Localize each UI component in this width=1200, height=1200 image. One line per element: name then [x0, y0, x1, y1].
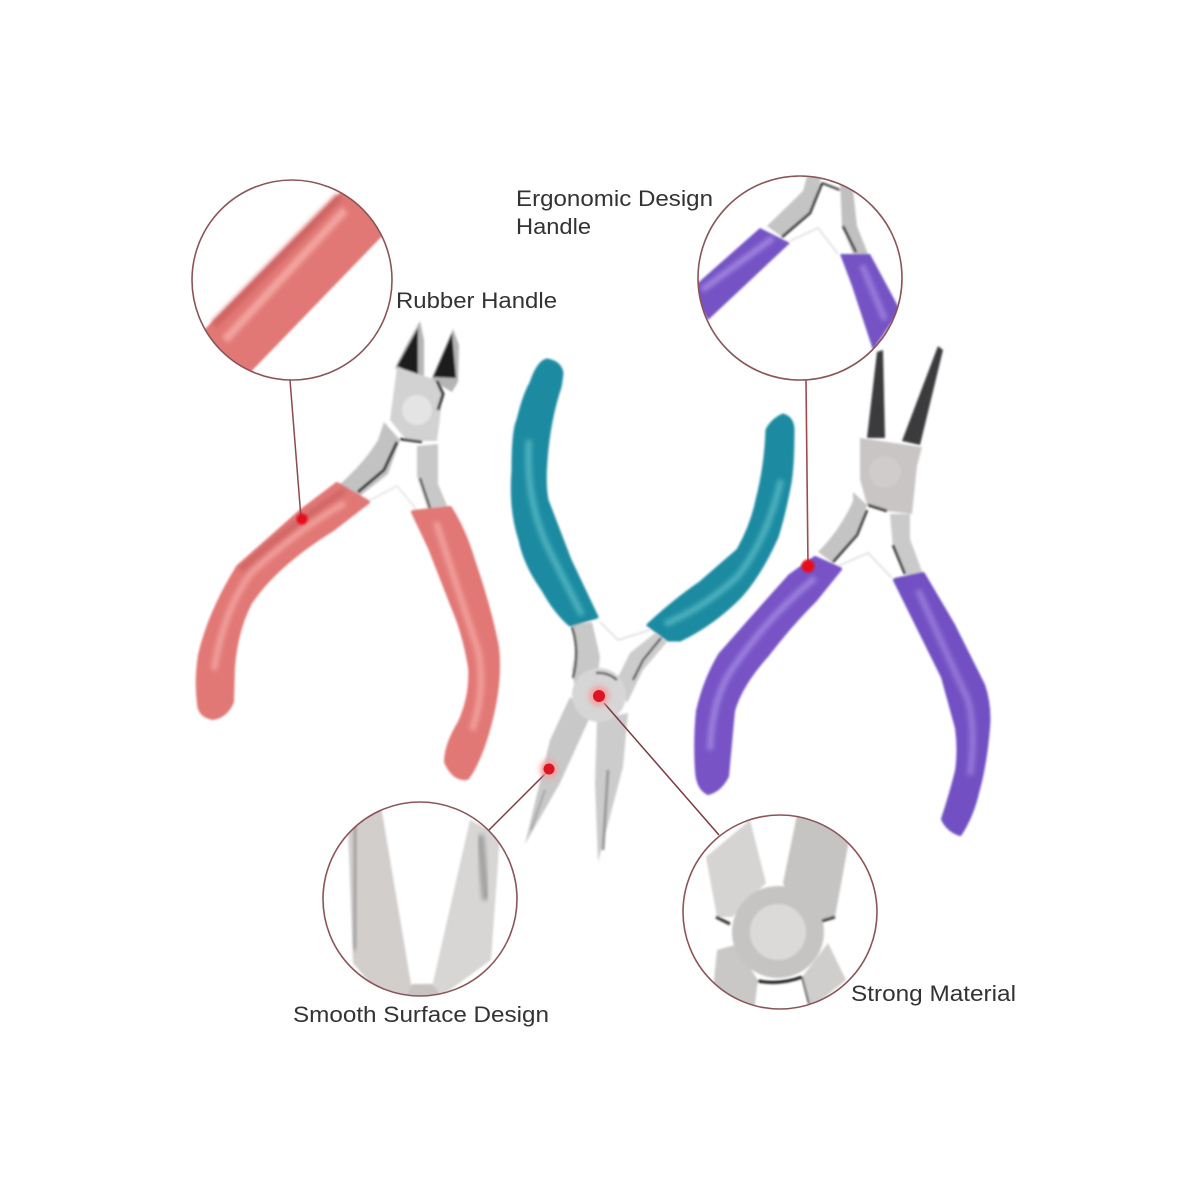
purple pliers metal arms and pivot: [818, 438, 923, 578]
callout: ergonomic design zoom circle: [690, 176, 902, 380]
ergonomic handle detail: [690, 176, 900, 350]
leader line: smooth surface: [489, 772, 547, 830]
label: ergonomic design handle: Ergonomic Design: [516, 186, 713, 211]
label: strong material: Strong Material: [851, 981, 1016, 1006]
pliers: coral side cutter: [198, 321, 498, 778]
coral pliers jaws: [395, 321, 459, 392]
label: smooth surface design: Smooth Surface Design: [293, 1002, 549, 1027]
marker dot: strong material: [589, 686, 609, 706]
leader line: ergonomic design: [806, 380, 808, 565]
purple pliers jaws: [867, 346, 943, 445]
marker dot: smooth surface: [540, 760, 558, 778]
callout: smooth surface zoom circle: [323, 800, 517, 1000]
jaw detail: [347, 800, 500, 1000]
coral pliers metal arms and pivot: [338, 367, 449, 510]
teal pliers metal arms and pivot: [572, 622, 667, 722]
purple pliers left handle: [696, 558, 840, 793]
callout: strong material zoom circle: [683, 810, 877, 1012]
pliers: purple round nose: [696, 346, 988, 834]
leader line: strong material: [604, 703, 719, 835]
teal pliers jaws: [525, 697, 628, 862]
label: rubber handle: Rubber Handle: [396, 288, 557, 313]
pivot detail: [706, 810, 850, 1012]
teal pliers right handle: [648, 415, 793, 640]
teal pliers left handle: [512, 360, 597, 625]
marker dot: ergonomic design: [802, 560, 814, 572]
label: ergonomic design handle: Handle: [516, 214, 591, 239]
rubber band detail: [205, 191, 382, 371]
marker dot: rubber handle: [296, 514, 308, 524]
coral pliers right handle: [413, 508, 498, 778]
coral pliers left handle: [198, 484, 368, 718]
callout: rubber handle zoom circle: [192, 180, 392, 380]
leader line: rubber handle: [290, 380, 301, 518]
purple pliers right handle: [895, 574, 988, 834]
pliers: teal chain nose: [512, 360, 793, 862]
